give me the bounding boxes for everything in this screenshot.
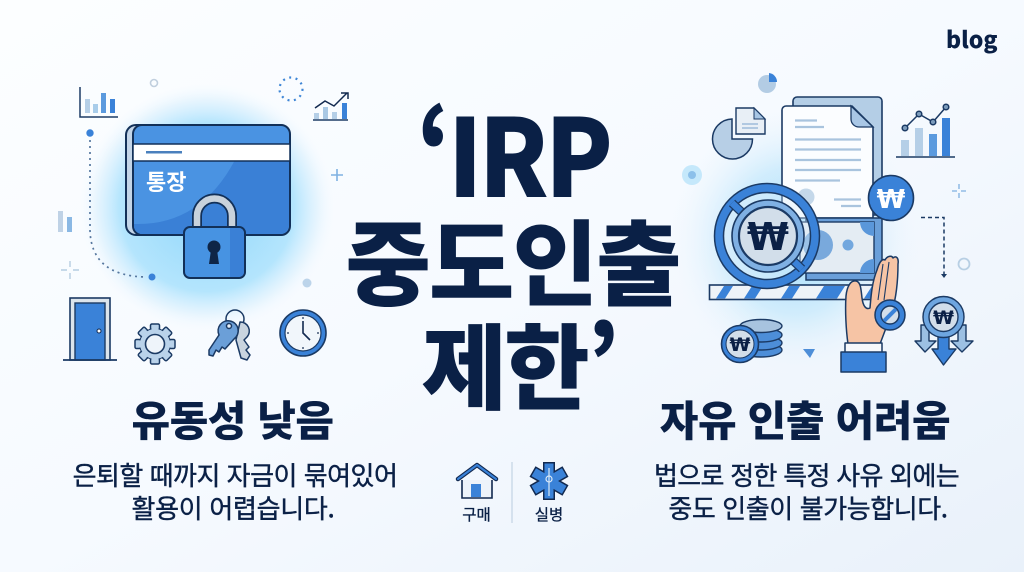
icon: dotted ring (280, 78, 302, 100)
text: difficult withdrawal description: 중도 인출이 불가능합니다. (668, 489, 948, 526)
icon: coin stack (722, 320, 782, 362)
icon: won coin (868, 176, 914, 220)
decorative ring (150, 80, 158, 86)
icon: line chart top (313, 93, 348, 120)
icon: house, purchase (458, 465, 496, 525)
glow: right illustration (670, 105, 920, 375)
icon: medical star, illness: 실병 (535, 503, 563, 525)
icon: medical star, illness (532, 462, 566, 525)
connector: dotted path (86, 129, 156, 280)
icon: clock (280, 310, 326, 356)
dot (302, 278, 312, 288)
ring (958, 258, 970, 270)
divider (511, 462, 513, 523)
icon: banknote (800, 218, 882, 280)
text: difficult withdrawal description (654, 456, 959, 526)
title: 중도인출 (345, 190, 680, 325)
label: bankbook: 통장 (146, 165, 186, 197)
title (345, 72, 680, 429)
icon: hand with stop sign (841, 256, 905, 372)
icon: line and bar chart right (896, 104, 955, 157)
icon: locked bankbook illustration (126, 125, 290, 278)
icon: small pie (758, 73, 777, 93)
icon: padlock (184, 198, 245, 278)
icon: barrier stripes (710, 285, 874, 300)
icon: bar chart top left (80, 87, 118, 117)
arrow: dashed down (921, 218, 947, 278)
text: difficult withdrawal description: 법으로 정한 특정 사유 외에는 (654, 456, 959, 493)
icon: coin stack: ₩ (730, 334, 751, 356)
triangle (803, 349, 815, 358)
icon: house, purchase: 구매 (462, 503, 491, 525)
icon: prohibited won sign: ₩ (747, 215, 789, 259)
icon: document stack (782, 97, 882, 218)
heading: low liquidity: 유동성 낮음 (132, 388, 333, 449)
sparkle mark (952, 184, 966, 198)
text: low liquidity description: 은퇴할 때까지 자금이 묶여있어 (73, 456, 397, 493)
icon: won coin with down arrows (915, 296, 973, 365)
heading: difficult withdrawal: 자유 인출 어려움 (660, 388, 950, 449)
icon: won coin: ₩ (877, 185, 906, 215)
icon: prohibited won sign (719, 188, 815, 284)
icon: won coin with down arrows: ₩ (933, 307, 954, 329)
text: low liquidity description (73, 456, 397, 526)
icon: door (63, 298, 117, 360)
small bars (58, 211, 72, 232)
icon: gear (135, 324, 175, 364)
plus mark (331, 169, 343, 181)
icon: pie chart with note (713, 108, 765, 159)
wordmark: blog: blog (946, 21, 998, 55)
title: 제한’ (422, 294, 616, 429)
glowing dot (682, 165, 702, 185)
icon: keys (209, 310, 250, 360)
glow: left illustration (79, 83, 335, 331)
sparkle mark (61, 261, 79, 279)
text: low liquidity description: 활용이 어렵습니다. (132, 489, 334, 526)
title: ‘IRP (417, 72, 609, 228)
